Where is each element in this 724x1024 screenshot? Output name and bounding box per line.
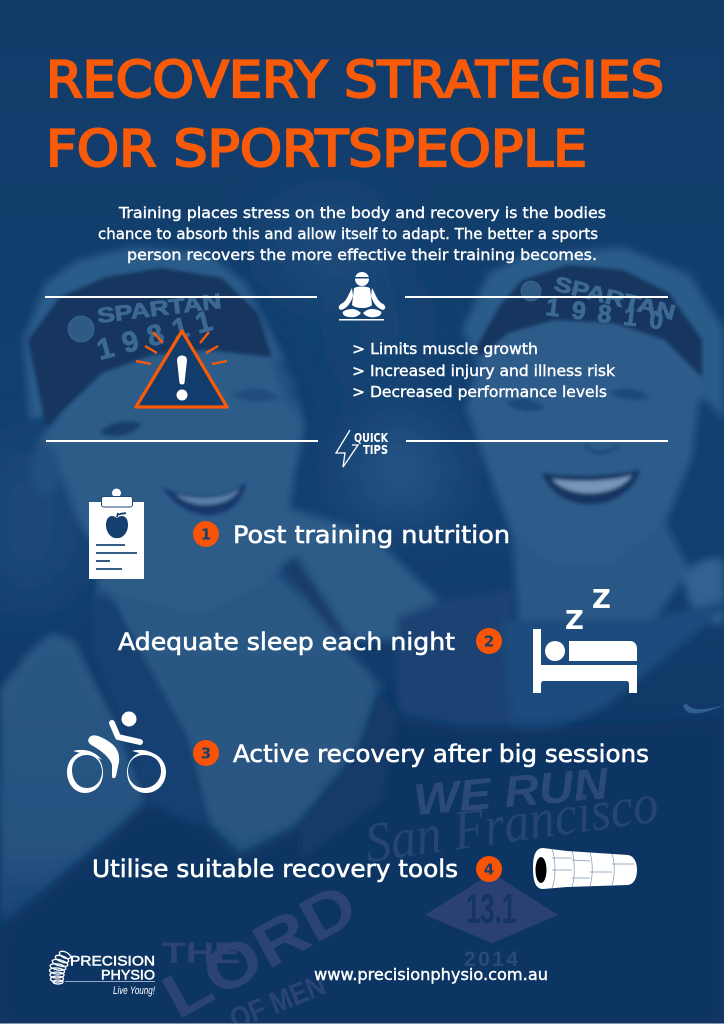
- title: RECOVERY STRATEGIES: [46, 51, 664, 109]
- right runner hair: [462, 247, 724, 420]
- tip 2: adequate sleep: Adequate sleep each night: [118, 628, 455, 656]
- icon: foam roller: [533, 848, 637, 889]
- left chest: [106, 575, 383, 857]
- raised hand: [684, 558, 724, 624]
- tip 1: post training nutrition: 1: [201, 526, 211, 544]
- icon: warning triangle: [136, 331, 227, 407]
- logo: Precision Physio: [49, 950, 155, 997]
- facial details: [100, 389, 650, 515]
- tip 1: post training nutrition: Post training nutrition: [233, 521, 510, 549]
- shirt strap right: [280, 556, 397, 860]
- icon: quick tips lightning bolt: QUICK: [354, 431, 389, 445]
- icon: meditating person: [339, 272, 385, 320]
- shirt strap left: [92, 590, 208, 827]
- icon: bed with sleeping person: [533, 585, 637, 693]
- icon: quick tips lightning bolt: [336, 430, 389, 467]
- left runner neck and arm wrap: [97, 507, 439, 640]
- tip 3: active recovery: Active recovery after big sessions: [233, 740, 649, 768]
- right runner neck: [512, 523, 690, 640]
- logo: Precision Physio: Live Young!: [113, 985, 155, 997]
- title: [46, 51, 664, 178]
- nike swoosh on shirt: [683, 703, 724, 713]
- shirt lettering: San Francisco: [361, 772, 662, 875]
- intro paragraph: chance to absorb this and allow itself to adapt. The better a sports: [98, 225, 598, 243]
- shirt lettering: [151, 759, 662, 1024]
- shirt lettering: THE: [162, 937, 240, 970]
- tip 2: adequate sleep: 2: [484, 632, 494, 650]
- consequences list: [352, 340, 615, 401]
- icon: clipboard with apple: [89, 488, 144, 579]
- lower shirt shadow: [0, 687, 724, 1024]
- shirt lettering: 2014: [464, 948, 518, 971]
- photo headband lettering: SPARTAN: [552, 273, 678, 325]
- photo headband lettering: 19810: [544, 293, 665, 335]
- icon: bed with sleeping person: Z: [565, 606, 584, 636]
- photo headband lettering: SPARTAN: [96, 290, 223, 328]
- left shoulder: [0, 633, 148, 930]
- website url: www.precisionphysio.com.au: [314, 965, 548, 984]
- left runner hair: [23, 247, 285, 420]
- intro paragraph: person recovers the more effective their training becomes.: [127, 246, 597, 264]
- shirt lettering: WE RUN: [412, 759, 611, 825]
- consequences list: > Decreased performance levels: [352, 383, 607, 401]
- photo headband lettering: [68, 273, 678, 367]
- intro paragraph: [98, 204, 606, 264]
- headbands: [28, 265, 702, 427]
- intro paragraph: Training places stress on the body and recovery is the bodies: [118, 204, 606, 222]
- divider: top: [45, 296, 668, 298]
- right runner face: [466, 320, 702, 565]
- logo: Precision Physio: PRECISION: [70, 952, 155, 968]
- consequences list: > Increased injury and illness risk: [352, 362, 615, 380]
- left runner ear shade: [270, 357, 297, 415]
- left runner face: [37, 350, 305, 602]
- logo: Precision Physio: PHYSIO: [101, 966, 155, 982]
- icon: bed with sleeping person: Z: [592, 585, 611, 615]
- title: FOR SPORTSPEOPLE: [46, 120, 587, 178]
- photo headband lettering: 19811: [94, 305, 216, 367]
- tip 4: recovery tools: 4: [484, 860, 494, 878]
- tip 4: recovery tools: Utilise suitable recovery tools: [92, 855, 458, 883]
- logo spring mark: [49, 950, 72, 984]
- shirt lettering: 13.1: [466, 885, 516, 932]
- consequences list: > Limits muscle growth: [352, 340, 538, 358]
- shirt shoulder panel: [397, 590, 515, 730]
- tip 3: active recovery: 3: [201, 744, 211, 762]
- icon: quick tips lightning bolt: TIPS: [363, 443, 388, 457]
- icon: cyclist: [67, 712, 166, 793]
- divider: middle: [46, 440, 668, 442]
